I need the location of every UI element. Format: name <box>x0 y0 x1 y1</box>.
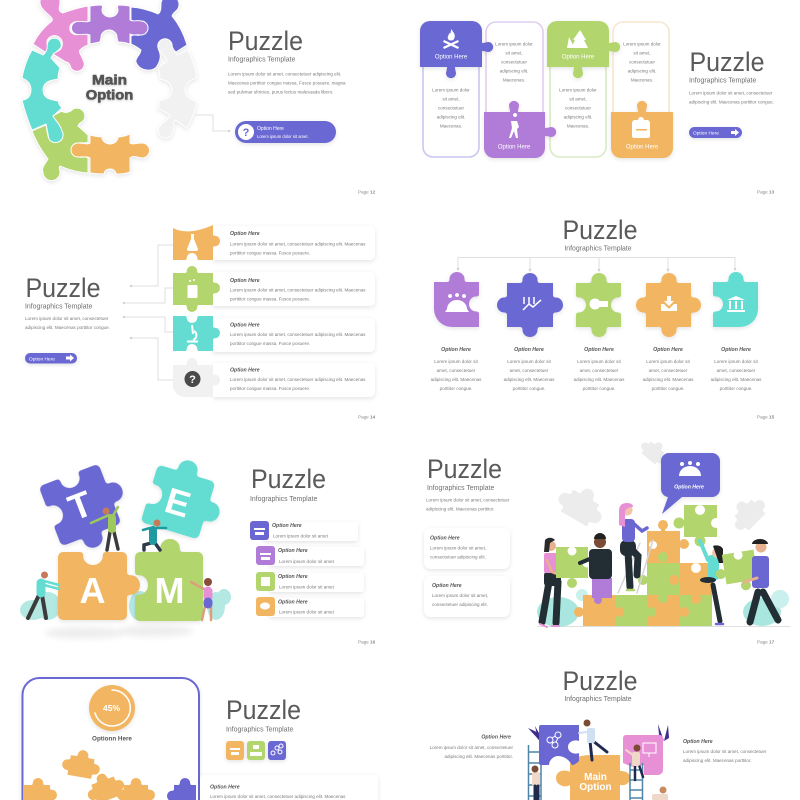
cards <box>213 226 375 397</box>
text: card 2: Lorem ipsum dolor <box>495 42 533 46</box>
list row 3: Lorem ipsum dolor sit amet <box>279 584 335 590</box>
text: column 5: porttitor congue. <box>720 386 752 391</box>
text left: adipiscing elit. Maecenas porttitor. <box>444 754 513 759</box>
text: card 1: Maecenas. <box>440 124 462 128</box>
piece: M <box>135 539 203 621</box>
text: card 4: Maecenas. <box>631 78 653 82</box>
piece: E: E <box>160 479 195 526</box>
text: option 1: Option Here <box>230 231 260 237</box>
callout: option button <box>235 121 336 143</box>
panel: slide 16 team illustration <box>20 452 376 644</box>
page number: Page 16 <box>358 640 376 644</box>
figure: woman holding piece <box>700 541 723 624</box>
piece: orange flask <box>173 225 220 260</box>
text block <box>426 498 510 512</box>
text: card 1: adipiscing elit. <box>437 114 465 120</box>
title: Puzzle <box>228 26 303 56</box>
text: card 3 <box>559 88 597 128</box>
figure: man dark sweater <box>580 533 612 604</box>
list row 1: Lorem ipsum dolor sit amet <box>273 534 329 538</box>
scattered pieces <box>24 747 155 800</box>
text: column 4: Lorem ipsum dolor sit <box>646 359 690 364</box>
panel: slide 12 puzzle ring <box>22 0 376 194</box>
text block: Lorem ipsum dolor sit amet, consectetuer adipiscing elit. <box>228 72 341 76</box>
text: card 3: sit amet, <box>569 96 587 102</box>
text block <box>228 72 346 94</box>
subtitle: Infographics Template <box>427 485 494 492</box>
piece: teal <box>713 272 758 327</box>
text right <box>683 739 767 763</box>
card 2 footer <box>484 101 556 158</box>
text: column 1: porttitor congue. <box>440 386 472 391</box>
text: column 2 <box>504 347 555 391</box>
text: card 4: Lorem ipsum dolor <box>623 42 661 46</box>
text: column 2: amet, consectetuer <box>510 368 549 373</box>
list row 4: Option Here <box>278 600 308 606</box>
text: column 1: Option Here <box>441 347 471 353</box>
page number: Page 13 <box>757 190 775 194</box>
subtitle: Infographics Template <box>564 246 632 252</box>
list row 1 <box>250 521 358 541</box>
text right: Option Here <box>683 739 713 745</box>
text: column 3: adipiscing elit. Maecenas <box>574 377 625 382</box>
page number: Page 17 <box>757 640 775 644</box>
page number: Page 12 <box>358 190 376 194</box>
heading: main option: Main <box>92 72 127 88</box>
frame <box>22 678 199 800</box>
text: column 5 <box>711 347 762 391</box>
text left <box>430 734 513 759</box>
piece: M: M <box>154 570 184 611</box>
text: card 2: adipiscing elit. <box>500 68 528 74</box>
icon badges <box>226 741 286 760</box>
connectors <box>123 245 173 380</box>
piece: blue network <box>539 725 579 765</box>
subtitle: Infographics Template <box>226 726 293 734</box>
puzzle tower <box>574 520 712 626</box>
piece: E <box>141 452 232 543</box>
text: column 2: porttitor congue. <box>513 386 545 391</box>
text: column 4: Option Here <box>653 347 683 353</box>
text: column 2: adipiscing elit. Maecenas <box>504 377 555 382</box>
text: column 2: Option Here <box>514 347 544 353</box>
text: option 4: Lorem ipsum dolor sit amet, consectetuer adipiscing elit. Maecenas <box>230 377 366 382</box>
callout: option button: ? <box>243 127 250 139</box>
text: column 5: adipiscing elit. Maecenas <box>711 377 762 382</box>
ground line <box>537 626 790 628</box>
figure: woman pushing <box>191 578 212 620</box>
panel: slide 17 team building <box>424 434 790 644</box>
text: card 1: Lorem ipsum dolor <box>432 88 470 92</box>
text: column 1 <box>431 347 482 391</box>
piece: pink presentation <box>623 735 663 775</box>
text: option 3: Option Here <box>230 322 260 328</box>
title: Puzzle <box>226 695 301 725</box>
card 4 footer: Option Here <box>626 144 659 150</box>
text block: adipiscing elit. Maecenas porttitor congue. <box>689 100 774 104</box>
card outlines <box>423 22 669 157</box>
piece: T: T <box>63 482 98 529</box>
text: card 1 <box>432 88 470 128</box>
figure: kneeling man <box>143 520 166 550</box>
panel: slide 14 option list <box>25 225 376 420</box>
text block: Lorem ipsum dolor sit amet, consectetuer <box>689 90 773 96</box>
figure: woman with puzzle left <box>540 538 562 627</box>
text card: Lorem ipsum dolor sit amet, consectetuer adipiscing elit. Maecenas <box>210 794 346 799</box>
gray floating pieces <box>553 434 771 536</box>
piece: A <box>58 552 140 620</box>
figure: man bottom right <box>652 786 668 800</box>
card 1 header <box>420 21 493 78</box>
piece: green beaker <box>173 266 220 312</box>
text block: Lorem ipsum dolor sit amet, consectetuer <box>25 316 109 321</box>
text block: sed pulvinar ultricies, purus lectus malesuada libero. <box>228 90 333 94</box>
piece: orange <box>71 134 150 174</box>
text right: Lorem ipsum dolor sit amet, consectetuer <box>683 749 767 754</box>
panel: slide 13 four option cards <box>420 21 775 194</box>
piece: gray question <box>173 358 220 397</box>
card 2 footer: Option Here <box>498 144 531 150</box>
text: card 2: consectetuer <box>501 60 527 64</box>
piece: green <box>576 273 621 337</box>
piece: teal <box>22 38 63 143</box>
text: column 2: Lorem ipsum dolor sit <box>507 359 551 364</box>
piece: orange main option <box>556 755 630 800</box>
text: option 4: Option Here <box>230 368 260 374</box>
title: Puzzle <box>427 454 502 484</box>
figure: man top left <box>91 507 118 550</box>
title: Puzzle <box>251 464 326 494</box>
piece: pink <box>33 0 88 71</box>
callout: option button: Option Here <box>257 126 284 132</box>
button: Option Here <box>29 356 55 362</box>
list row 4: Lorem ipsum dolor sit amet <box>279 610 335 614</box>
speech bubble <box>661 453 720 514</box>
text: column 3: Option Here <box>584 347 614 353</box>
heading: main option: Option <box>86 86 133 102</box>
figure: jumping man <box>579 720 607 760</box>
list row 1: Option Here <box>272 523 302 529</box>
title: Puzzle <box>26 273 100 303</box>
piece: T <box>39 459 138 558</box>
text: column 3: porttitor congue. <box>583 386 615 391</box>
text: card 1: consectetuer <box>438 106 464 110</box>
piece: green <box>32 108 88 180</box>
page number: Page 15 <box>757 414 775 420</box>
text block: Maecenas porttitor congue massa. Fusce posuere, magna <box>228 80 346 86</box>
card 4 footer <box>611 101 673 158</box>
bushes <box>537 589 789 627</box>
text: column 1: amet, consectetuer <box>437 368 476 373</box>
ground shadows <box>45 625 193 639</box>
bushes <box>20 589 231 621</box>
text card: Option Here <box>210 784 240 790</box>
piece: A: A <box>80 570 106 611</box>
piece: blue <box>497 273 563 337</box>
text: column 4 <box>643 347 694 391</box>
list row 2 <box>256 546 364 566</box>
subtitle: Infographics Template <box>564 696 632 703</box>
callout: option button: Lorem ipsum dolor sit amet. <box>257 134 309 139</box>
card 2: Option Here <box>432 583 462 589</box>
text: card 2: Maecenas. <box>503 78 525 82</box>
piece: orange main option: Main <box>584 772 607 783</box>
text: card 1: sit amet, <box>442 96 460 102</box>
text: column 5: Lorem ipsum dolor sit <box>714 359 758 364</box>
text: option 1: Lorem ipsum dolor sit amet, consectetuer adipiscing elit. Maecenas <box>230 242 366 246</box>
text block: adipiscing elit. Maecenas porttitor. <box>426 506 494 512</box>
figure: man pushing <box>28 572 59 618</box>
text: card 3: Maecenas. <box>567 124 589 128</box>
button <box>689 127 742 138</box>
button: Option Here <box>693 130 719 136</box>
card 1: Lorem ipsum dolor sit amet, <box>430 546 486 550</box>
held green piece right <box>713 548 760 595</box>
list row 3 <box>256 572 364 592</box>
text: column 1: Lorem ipsum dolor sit <box>434 359 478 364</box>
piece: blue <box>131 0 187 70</box>
list row 3: Option Here <box>278 574 308 580</box>
figure: walking man <box>744 539 778 622</box>
ladders <box>528 745 541 800</box>
subtitle: Infographics Template <box>25 304 92 310</box>
text: option 3: Lorem ipsum dolor sit amet, consectetuer adipiscing elit. Maecenas <box>230 332 366 337</box>
card 2: consectetuer adipiscing elit. <box>432 602 488 607</box>
chart: 45% progress circle <box>89 685 135 731</box>
text: option 2 <box>230 278 366 302</box>
card 1: Option Here <box>430 536 460 542</box>
page number: Page 14 <box>358 414 376 420</box>
piece: purple <box>72 5 148 44</box>
text: column 4: amet, consectetuer <box>649 368 688 373</box>
title: Puzzle <box>690 47 764 77</box>
text: card 3: adipiscing elit. <box>564 114 592 120</box>
text block: adipiscing elit. Maecenas porttitor congue. <box>25 325 110 330</box>
card 2: Lorem ipsum dolor sit amet, <box>432 593 488 598</box>
speech bubble: Option Here <box>674 484 704 490</box>
leaves <box>528 724 669 741</box>
title: Puzzle <box>562 666 638 696</box>
text: card 2 <box>495 42 533 82</box>
figure: woman pointing <box>626 744 643 780</box>
panel: slide 18 progress frame <box>22 678 378 800</box>
figure: woman on ladder <box>618 503 653 593</box>
text: option 2: Option Here <box>230 278 260 284</box>
text: option 2: porttitor congue massa. Fusce posuere. <box>230 296 310 302</box>
label: Optionn Here <box>92 736 132 742</box>
held green piece left <box>556 546 592 588</box>
card 3 header <box>547 21 620 78</box>
connector tree <box>458 258 735 271</box>
text: option 3: porttitor congue massa. Fusce posuere. <box>230 341 310 346</box>
figure: woman on ladder <box>532 766 540 800</box>
text: column 1: adipiscing elit. Maecenas <box>431 377 482 382</box>
title: Puzzle <box>562 215 638 245</box>
subtitle: Infographics Template <box>689 78 756 84</box>
text: option 4 <box>230 368 366 391</box>
text: column 3: amet, consectetuer <box>580 368 619 373</box>
card 1 <box>424 528 510 569</box>
text: column 5: Option Here <box>721 347 751 353</box>
button <box>25 353 77 364</box>
text: option 1 <box>230 231 366 256</box>
text: option 2: Lorem ipsum dolor sit amet, consectetuer adipiscing elit. Maecenas <box>230 288 366 292</box>
text: card 3: consectetuer <box>565 106 591 110</box>
piece: blue <box>167 778 196 800</box>
text: card 2: sit amet, <box>505 50 523 56</box>
text: card 3: Lorem ipsum dolor <box>559 88 597 92</box>
list row 4 <box>256 597 364 617</box>
card 1 header: Option Here <box>435 54 468 60</box>
text: card 4 <box>623 42 661 82</box>
chart: 45% progress circle: 45% <box>103 703 120 713</box>
chart: puzzle ring <box>22 0 197 180</box>
card 3 header: Option Here <box>562 54 595 60</box>
text left: Option Here <box>481 734 511 740</box>
heading: main option <box>86 72 133 102</box>
card 1: consectetuer adipiscing elit. <box>430 554 486 560</box>
text: column 4: porttitor congue. <box>652 386 684 391</box>
subtitle: Infographics Template <box>250 496 317 503</box>
text: column 5: amet, consectetuer <box>717 368 756 373</box>
floating green piece <box>674 505 721 546</box>
list row 2: Option Here <box>278 548 308 554</box>
text: option 1: porttitor congue massa. Fusce posuere. <box>230 250 310 256</box>
text: column 3: Lorem ipsum dolor sit <box>577 359 621 364</box>
subtitle: Infographics Template <box>228 56 295 64</box>
piece: purple <box>434 272 479 327</box>
panel: slide 19 main option illustration <box>430 666 767 800</box>
piece: orange <box>636 273 701 337</box>
text left: Lorem ipsum dolor sit amet, consectetuer <box>430 745 513 750</box>
arrow: connector <box>195 115 230 131</box>
piece: orange main option: Option <box>579 782 612 793</box>
text: column 3 <box>574 347 625 391</box>
list row 2: Lorem ipsum dolor sit amet <box>279 559 335 564</box>
text: card 4: adipiscing elit. <box>628 68 656 74</box>
text block <box>689 90 774 104</box>
text card <box>200 775 378 800</box>
panel: slide 15 five pieces <box>431 215 775 420</box>
text: card 4: sit amet, <box>633 50 651 56</box>
text: option 3 <box>230 322 366 346</box>
piece: teal microscope <box>173 316 220 351</box>
text: column 4: adipiscing elit. Maecenas <box>643 377 694 382</box>
piece: gray <box>158 39 197 138</box>
text block <box>25 316 110 330</box>
text: option 4: porttitor congue massa. Fusce posuere. <box>230 386 310 391</box>
text right: adipiscing elit. Maecenas porttitor. <box>683 758 752 763</box>
piece: gray question: ? <box>189 374 196 386</box>
card 2 <box>424 576 510 617</box>
text: card 4: consectetuer <box>629 60 655 64</box>
text block: Lorem ipsum dolor sit amet, consectetuer <box>426 498 510 502</box>
right ladder <box>630 763 642 800</box>
